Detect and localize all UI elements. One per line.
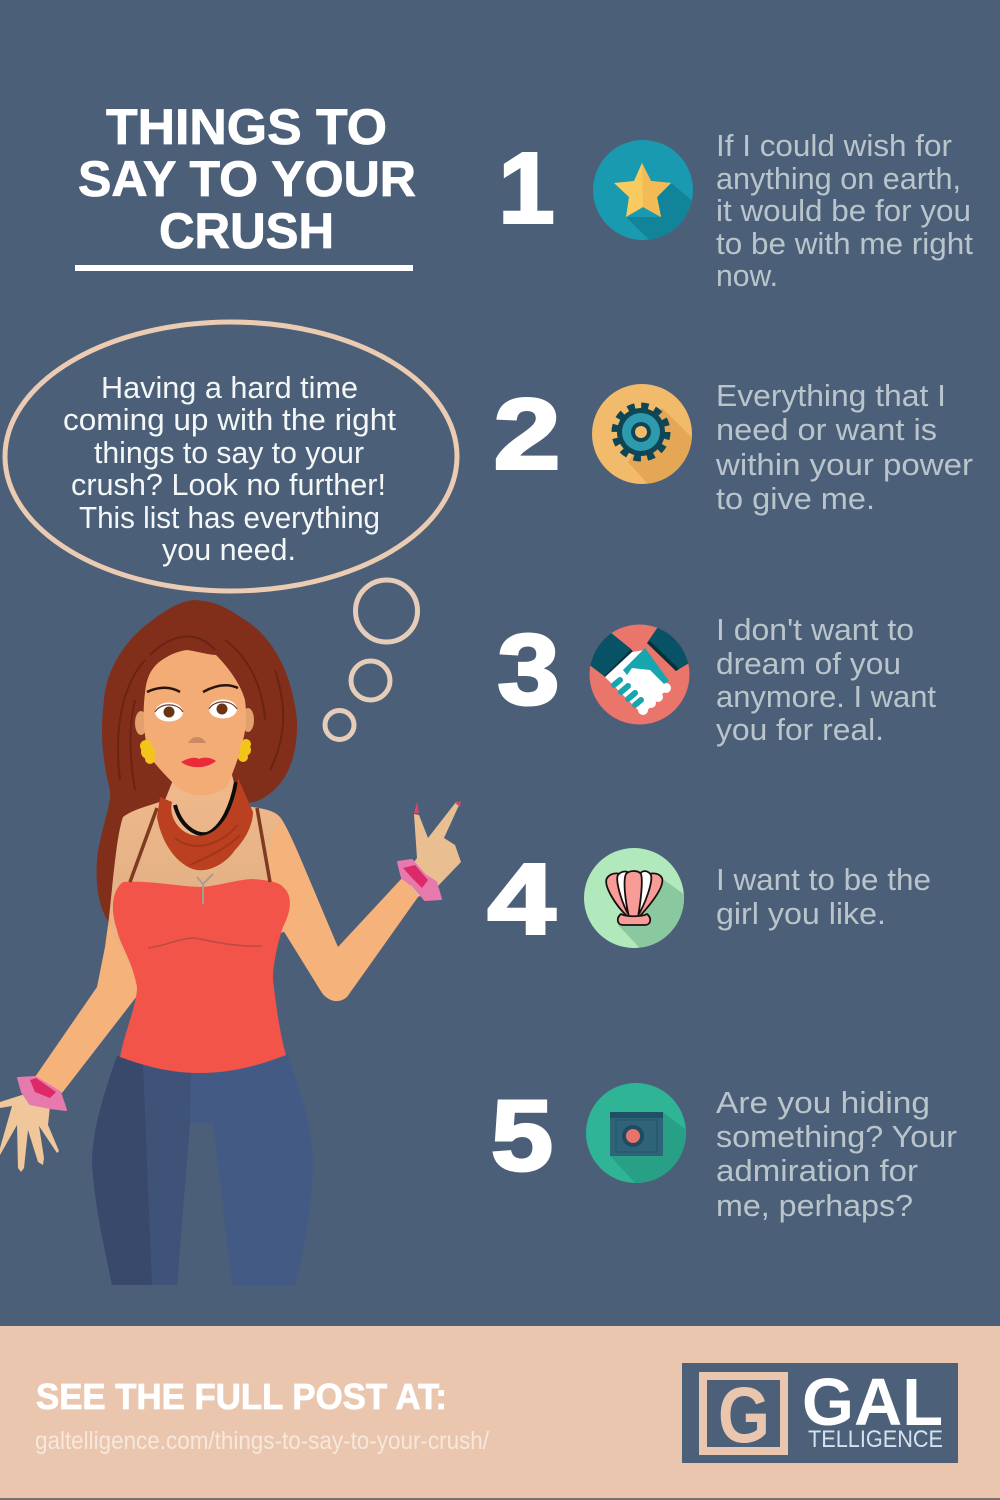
right scrunchie [398, 860, 441, 900]
left scrunchie [18, 1077, 66, 1110]
text: item 1: now. [716, 258, 778, 293]
top crease [148, 938, 262, 948]
footer band [0, 1326, 1000, 1500]
text: item 2: need or want is [716, 412, 937, 447]
logo: GAL [802, 1365, 943, 1440]
logo: TELLIGENCE [808, 1426, 943, 1453]
text: item 2: to give me. [716, 481, 875, 516]
text: item 3: you for real. [716, 712, 884, 747]
speech bubble: things to say to your [94, 435, 364, 470]
speech bubble: coming up with the right [63, 402, 396, 437]
icon: handshake [590, 624, 690, 724]
text: item 3: anymore. I want [716, 679, 936, 714]
woman character [0, 600, 461, 1285]
text: item 1: anything on earth, [716, 161, 961, 196]
neck shading [175, 782, 236, 834]
icon: shell [584, 848, 684, 948]
title: CRUSH [159, 203, 334, 259]
icon: star [593, 140, 693, 240]
speech bubble: This list has everything [79, 500, 380, 535]
thought bubbles [325, 580, 418, 740]
hair back [97, 600, 297, 927]
number 5: 5 [491, 1080, 553, 1192]
necklace [197, 874, 213, 904]
nose [188, 737, 206, 743]
text: item 4: I want to be the [716, 862, 931, 897]
text: item 5 [716, 1085, 957, 1223]
logo [682, 1363, 958, 1463]
speech bubble: Having a hard time [101, 370, 358, 405]
text: item 5: Are you hiding [716, 1085, 930, 1120]
speech bubble [5, 322, 457, 591]
speech bubble: you need. [162, 532, 296, 567]
jeans [92, 1053, 313, 1285]
logo: G [718, 1370, 770, 1459]
ears [135, 708, 254, 735]
text: item 4 [716, 862, 931, 931]
number 2: 2 [494, 378, 560, 490]
body skin [105, 775, 288, 995]
earrings [140, 739, 251, 764]
right hand [403, 802, 461, 897]
icon: gear [592, 384, 692, 484]
face [144, 650, 246, 795]
text: item 2: within your power [715, 447, 973, 482]
right arm [265, 817, 418, 1001]
footer url: galtelligence.com/things-to-say-to-your-crush/ [35, 1427, 489, 1455]
nails [414, 801, 461, 813]
eyes [155, 700, 237, 722]
scarf [157, 778, 253, 870]
text: item 3 [716, 612, 936, 747]
text: item 2 [715, 378, 973, 516]
text: item 1 [716, 128, 973, 293]
title: THINGS TO [106, 99, 387, 155]
text: item 2: Everything that I [716, 378, 946, 413]
text: item 4: girl you like. [716, 896, 886, 931]
icon: safe [586, 1083, 686, 1183]
number 4: 4 [488, 844, 556, 956]
red top [113, 879, 290, 1073]
hair strands [118, 636, 283, 790]
title [75, 99, 416, 271]
text: item 3: dream of you [716, 646, 901, 681]
left arm [35, 925, 137, 1093]
text: item 5: something? Your [716, 1119, 957, 1154]
eyebrows [147, 685, 238, 692]
straps [130, 808, 270, 882]
number 3: 3 [498, 614, 560, 726]
title: SAY TO YOUR [78, 151, 416, 207]
text: item 1: to be with me right [716, 226, 973, 261]
text: item 1: it would be for you [716, 193, 971, 228]
footer heading: SEE THE FULL POST AT: [36, 1376, 447, 1417]
speech bubble: crush? Look no further! [71, 467, 386, 502]
text: item 1: If I could wish for [716, 128, 952, 163]
number 1: 1 [498, 132, 554, 244]
text: item 5: admiration for [716, 1153, 918, 1188]
text: item 3: I don't want to [716, 612, 914, 647]
text: item 5: me, perhaps? [716, 1188, 913, 1223]
lips [181, 758, 216, 767]
left hand [0, 1094, 59, 1172]
